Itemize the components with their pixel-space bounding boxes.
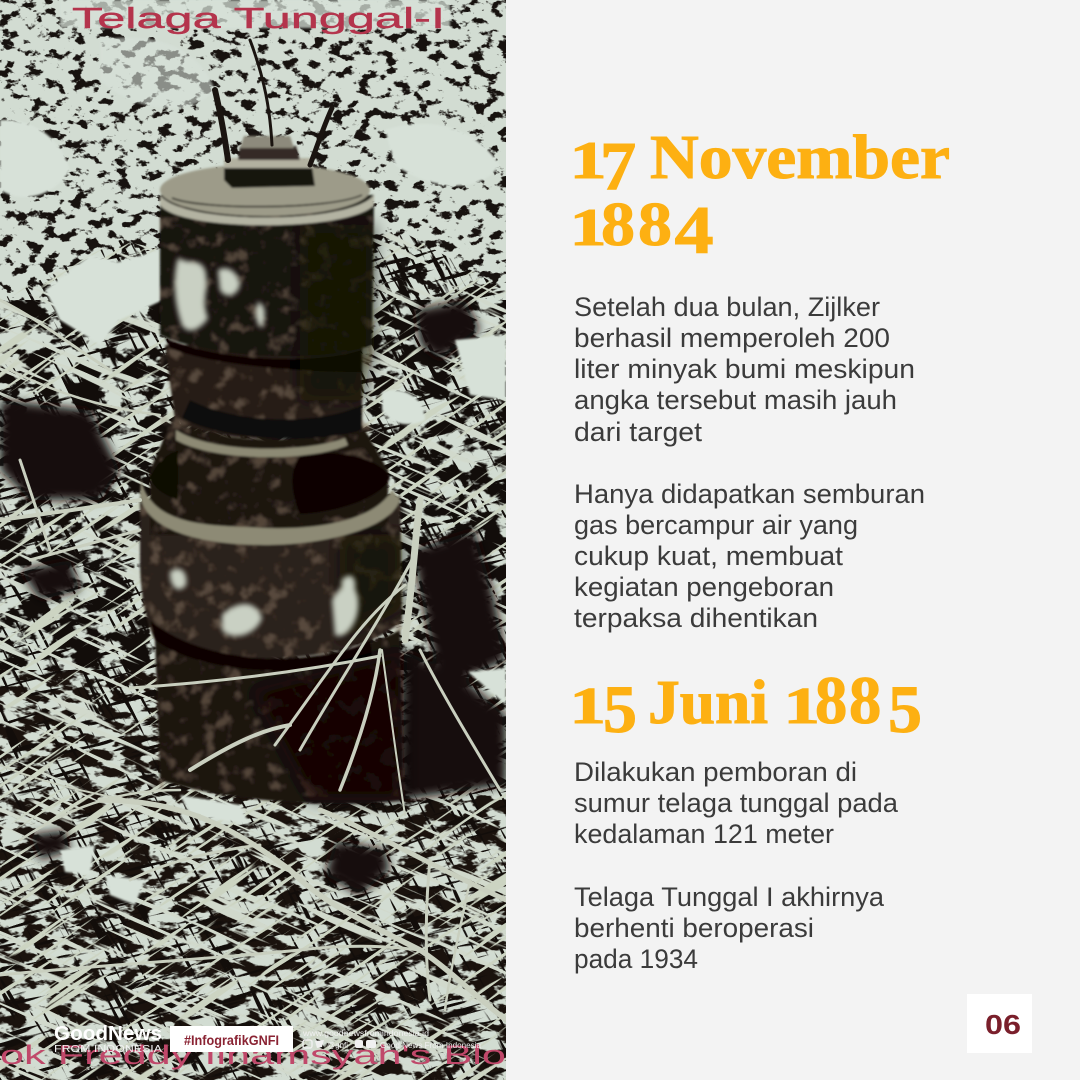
photo: Telaga Tunggal well head [0,0,506,1080]
heading: 17 November 1884: 1 [570,198,607,257]
lower pipe section [155,630,404,804]
text block: drilling halted: gas bercampur air yang [574,510,858,540]
text block: Zijlker result: dari target [574,417,703,447]
text block: Zijlker result: angka tersebut masih jauh [574,385,897,415]
text block: drilling halted: Hanya didapatkan semburan [574,479,925,509]
text block: Zijlker result [574,292,915,447]
ring opening [150,450,178,500]
heading: 15 Juni 1885: 1 [784,677,820,735]
text block: Zijlker result: Setelah dua bulan, Zijlker [574,292,880,322]
heading: 15 Juni 1885 [570,664,922,747]
panel: text background [506,0,1080,1080]
heading: 15 Juni 1885: 8 [849,664,881,738]
rust mottling [140,200,405,800]
lid [160,164,370,216]
hashtag badge [170,1026,293,1052]
brand logo: GoodNews from Indonesia: GoodNews [54,1023,162,1045]
photo credit watermark: ok Freddy Ilhamsyah's Blo [0,1040,506,1070]
heading: 17 November 1884: 8 [601,190,635,259]
heading: 15 Juni 1885: 1 [570,677,606,735]
heading: 17 November 1884: 1 [570,131,607,190]
hex bolt [224,166,315,188]
text block: drilling halted: kegiatan pengeboran [574,572,834,602]
text block: drilling depth: Dilakukan pemboran di [574,757,857,787]
photo caption: Telaga Tunggal-I: Telaga Tunggal-I [72,3,445,35]
page number badge [967,994,1032,1053]
grass stalks [0,40,506,1020]
pale foliage patches [0,0,506,905]
text block: Zijlker result: berhasil memperoleh 200 [574,323,890,353]
brand logo: GoodNews from Indonesia [54,1023,162,1055]
text block: end of operation [574,882,885,974]
page number badge: 06 [985,1009,1021,1040]
heading: 15 Juni 1885: 5 [603,671,637,747]
heading: 15 Juni 1885: Juni [648,669,768,737]
third cylinder [150,420,388,535]
social links: @gnfi [327,1041,348,1050]
text block: end of operation: pada 1934 [574,944,698,974]
well head: stacked iron cylinders [140,136,405,804]
text block: drilling depth: kedalaman 121 meter [574,819,834,849]
social links [302,1029,482,1050]
collar [165,345,362,439]
rust highlights [170,258,358,636]
hashtag badge: #InfografikGNFI [184,1032,279,1048]
heading: 17 November 1884: 8 [638,190,672,259]
text block: drilling halted: cukup kuat, membuat [574,541,844,571]
heading: 15 Juni 1885: 5 [888,671,922,747]
large ring body [140,495,402,659]
social links: Good News From Indonesia [380,1041,482,1050]
text block: Zijlker result: liter minyak bumi meskipun [574,354,915,384]
shadow bands [165,338,362,372]
text block: end of operation: Telaga Tunggal I akhirnya [574,882,885,912]
crossing grass strands [245,530,263,541]
text block: drilling halted [574,479,925,633]
heading: 17 November 1884: 7 [600,129,636,205]
text block: drilling depth: sumur telaga tunggal pada [574,788,899,818]
brand logo: GoodNews from Indonesia: FROM INDONESIA [54,1043,162,1055]
text block: end of operation: berhenti beroperasi [574,913,814,943]
heading: 17 November 1884: November [650,124,950,192]
upper cylinder [160,195,374,356]
ring rims [140,478,400,545]
text block: drilling depth [574,757,899,849]
text block: drilling halted: terpaksa dihentikan [574,603,818,633]
heading: 17 November 1884 [570,124,950,268]
heading: 15 Juni 1885: 8 [815,664,847,738]
heading: 17 November 1884: 4 [674,193,714,268]
social links: www.goodnewsfromindonesia.id [302,1029,429,1038]
dark gaps in the grass [0,300,506,895]
